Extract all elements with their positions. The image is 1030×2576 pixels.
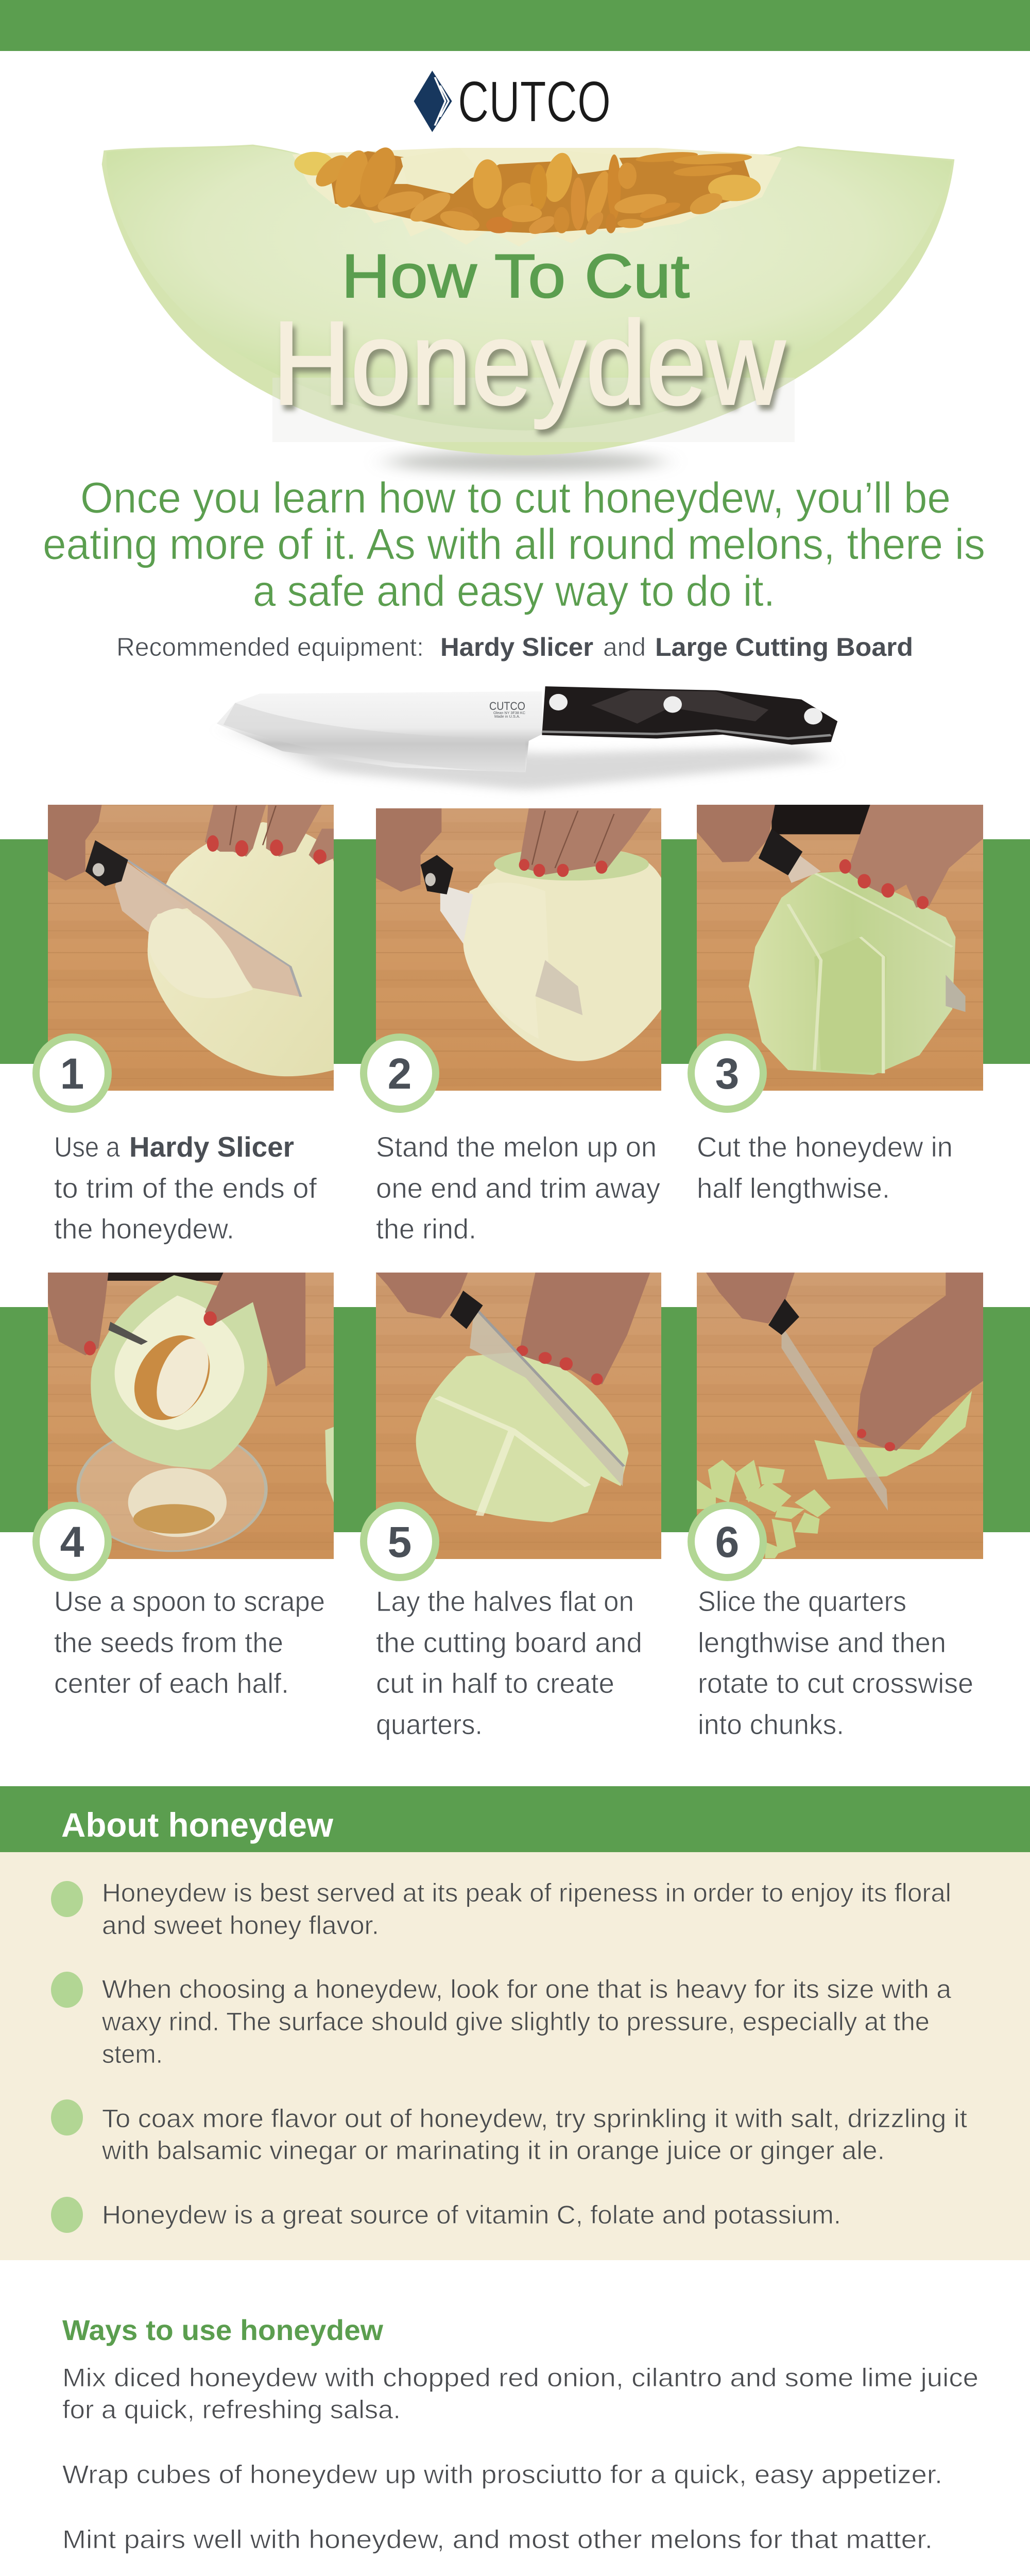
header bar — [0, 1786, 1030, 1852]
tip 1: Mix diced honeydew with chopped red onion, cilantro and some lime juice — [62, 2363, 978, 2392]
recommended equipment: and — [603, 633, 646, 662]
bullet 3: with balsamic vinegar or marinating it in orange juice or ginger ale. — [101, 2136, 885, 2165]
caption 4: center of each half. — [54, 1667, 289, 1699]
caption 3 — [697, 1131, 953, 1204]
bullet 1: Honeydew is best served at its peak of ripeness in order to enjoy its floral — [102, 1878, 951, 1907]
photo: step 3 — [697, 805, 983, 1091]
icon: Cutco diamond — [414, 71, 452, 132]
number badge 4: 4 — [60, 1518, 84, 1566]
blade etching: CUTCO — [489, 700, 525, 713]
caption 2: one end and trim away — [376, 1172, 660, 1204]
green band: row 1 — [0, 839, 1030, 1064]
number badge 3 — [691, 1037, 763, 1109]
panel background — [0, 1852, 1030, 2260]
step 2 — [364, 808, 661, 1245]
bullet 3: To coax more flavor out of honeydew, try sprinkling it with salt, drizzling it — [102, 2104, 967, 2133]
caption 2 — [376, 1131, 660, 1245]
title line: Honeydew: Honeydew — [272, 297, 785, 429]
number badge 6 — [691, 1505, 763, 1578]
caption 2: Stand the melon up on — [376, 1131, 657, 1163]
caption 3: Cut the honeydew in — [697, 1131, 953, 1163]
step 4 — [36, 1273, 334, 1699]
caption 1 — [54, 1131, 317, 1245]
recommended equipment: Recommended equipment: — [116, 633, 424, 662]
number badge 6: 6 — [715, 1518, 739, 1566]
recommended equipment: Large Cutting Board — [655, 633, 913, 662]
photo: step 1 — [48, 805, 334, 1091]
caption 6: into chunks. — [698, 1708, 844, 1740]
step 5 — [364, 1273, 661, 1740]
number badge 5 — [364, 1505, 436, 1578]
bullet 1 — [51, 1878, 951, 1940]
green band: row 2 — [0, 1307, 1030, 1532]
ways to use honeydew — [62, 2314, 978, 2576]
caption 5: Lay the halves flat on — [376, 1585, 634, 1617]
tip 1: for a quick, refreshing salsa. — [62, 2395, 401, 2424]
bullet 2: stem. — [102, 2040, 163, 2069]
blade etching — [489, 700, 525, 719]
caption 5: the cutting board and — [376, 1626, 642, 1658]
bullet 3 — [51, 2099, 967, 2165]
caption 1: the honeydew. — [54, 1213, 234, 1245]
intro text: Once you learn how to cut honeydew, you’ll be — [80, 473, 951, 522]
panel: about honeydew — [0, 1786, 1030, 2260]
title line: How To Cut: How To Cut — [341, 242, 690, 311]
title — [272, 242, 785, 429]
number badge 5: 5 — [388, 1518, 411, 1566]
number badge 2: 2 — [388, 1049, 411, 1098]
tip 3: Mint pairs well with honeydew, and most other melons for that matter. — [62, 2525, 933, 2554]
photo: step 2 — [376, 808, 661, 1091]
tip 2: Wrap cubes of honeydew up with prosciutto for a quick, easy appetizer. — [62, 2460, 942, 2489]
caption 6: rotate to cut crosswise — [698, 1667, 973, 1699]
tip 1 — [62, 2363, 978, 2424]
blade etching: Made in U.S.A. — [494, 715, 520, 719]
step 6 — [691, 1273, 983, 1740]
caption 4 — [54, 1585, 325, 1699]
blade etching: Olean NY 3F38 KC — [493, 711, 525, 715]
caption 6: lengthwise and then — [698, 1626, 946, 1658]
step 1 — [36, 805, 335, 1245]
caption 5: cut in half to create — [376, 1667, 614, 1699]
number badge 3: 3 — [715, 1049, 739, 1098]
hero melon slice — [102, 144, 955, 479]
translucent panel behind title — [272, 378, 795, 442]
caption 1: to trim of the ends of — [54, 1172, 317, 1204]
number badge 1: 1 — [60, 1049, 84, 1098]
bullet 2: When choosing a honeydew, look for one that is heavy for its size with a — [102, 1975, 951, 2004]
bullet 2 — [51, 1972, 951, 2069]
caption 4: the seeds from the — [54, 1626, 283, 1658]
caption 2: the rind. — [376, 1213, 476, 1245]
bullet 2: waxy rind. The surface should give slightly to pressure, especially at the — [101, 2007, 930, 2036]
intro text: a safe and easy way to do it. — [253, 567, 775, 615]
intro text: eating more of it. As with all round melons, there is — [43, 520, 985, 568]
number badge 4 — [36, 1505, 108, 1578]
caption 1: Hardy Slicer — [129, 1131, 294, 1163]
caption 6 — [698, 1585, 973, 1740]
heading: About honeydew — [61, 1806, 334, 1844]
logo: Cutco — [414, 70, 611, 134]
caption 5: quarters. — [376, 1708, 483, 1740]
caption 5 — [376, 1585, 642, 1740]
recommended equipment: Hardy Slicer — [440, 633, 593, 662]
bullet 1: and sweet honey flavor. — [102, 1911, 379, 1940]
photo: step 4 — [48, 1273, 334, 1559]
wordmark: CUTCO — [458, 70, 611, 134]
top green bar — [0, 0, 1030, 51]
number badge 2 — [364, 1037, 436, 1109]
number badge 1 — [36, 1037, 108, 1109]
photo: step 5 — [376, 1273, 661, 1559]
step 3 — [691, 805, 983, 1204]
caption 6: Slice the quarters — [698, 1585, 906, 1617]
knife: Hardy Slicer — [217, 686, 837, 790]
caption 1: Use a — [54, 1131, 120, 1163]
heading: Ways to use honeydew — [62, 2314, 383, 2346]
caption 4: Use a spoon to scrape — [54, 1585, 325, 1617]
recommended equipment — [116, 633, 913, 662]
caption 3: half lengthwise. — [697, 1172, 890, 1204]
photo: step 6 — [697, 1273, 983, 1559]
bullet 4: Honeydew is a great source of vitamin C, folate and potassium. — [102, 2200, 841, 2229]
intro text — [43, 473, 985, 615]
